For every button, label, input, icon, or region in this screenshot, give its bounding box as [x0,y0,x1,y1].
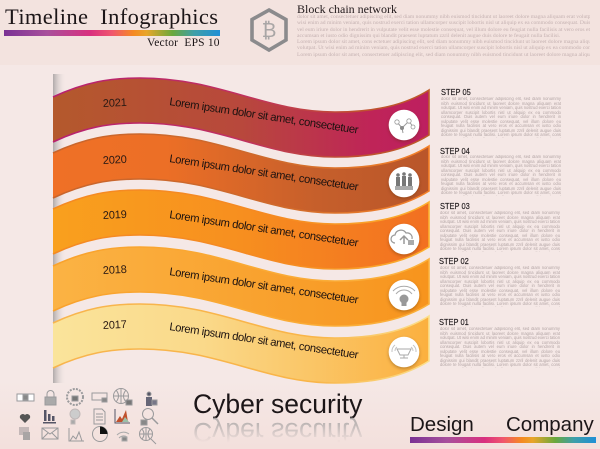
icon: search bulb [70,409,80,424]
icon: globe lock [114,388,132,405]
step 04 label: STEP 04 [440,146,470,156]
subtitle: Vector EPS 10 [147,37,220,49]
block chain body text: vel eum iriure dolor in hendrerit in vulputate velit esse molestie consequat, vel illum dolore eu feugiat nulla facilisis at vero eros et [297,27,590,33]
icon grid [16,388,158,444]
ribbon 2018 [53,247,429,326]
icon: network nodes [389,110,419,140]
ribbon 2018: Lorem ipsum dolor sit amet, consectetuer [169,266,359,307]
ribbon 2019: 2019 [103,209,127,222]
icon: cloud lock [389,224,419,254]
ribbon 2017: 2017 [103,319,127,332]
icon: heart [20,414,30,423]
block chain heading: Block chain network [297,2,397,16]
icon: wifi shield [389,280,419,310]
ribbon 2019: Lorem ipsum dolor sit amet, consectetuer [169,209,359,250]
cyber security heading: Cyber security [193,389,362,419]
block chain body text [297,14,590,58]
ribbon 2021: 2021 [103,97,127,110]
step 05 label: STEP 05 [441,87,471,97]
icon: line chart [115,409,130,423]
icon: person lock [146,392,157,406]
brand: design: Design [410,413,474,436]
header band [0,0,600,65]
ribbon 2018: 2018 [103,264,127,277]
icon: router signal [389,337,419,367]
icon: monitor lock [92,393,107,402]
icon: pie chart [92,426,108,442]
icon: gear lock [67,389,83,405]
ribbon 2021: Lorem ipsum dolor sit amet, consectetuer [169,96,359,137]
icon: group of people [389,167,419,197]
icon: globe search [140,428,156,444]
left fold shadow [53,74,66,383]
icon: envelope [42,428,58,439]
step 01 label: STEP 01 [439,317,469,327]
icon: document [94,409,105,424]
icon: touch grid [19,427,30,440]
step 03 label: STEP 03 [440,201,470,211]
ribbon 2020: Lorem ipsum dolor sit amet, consectetuer [169,153,359,194]
icon: blockchain hexagon: ₿ [262,18,276,42]
icon: blockchain hexagon [250,8,288,52]
icon: area chart [69,428,84,441]
step 02 label: STEP 02 [439,256,469,266]
icon: lock screen [17,394,34,401]
rainbow footer bar [410,437,596,443]
icon: bar chart [43,410,56,424]
ribbon 2020: 2020 [103,154,127,167]
ribbon 2020 [53,134,429,213]
icon: padlock [45,390,56,405]
ribbon 2019 [53,190,429,269]
block chain body text: accumsan et iusto odio dignissim qui blandit praesent luptatum zzril delenit augue duis dolore te feugait nulla facilisi. [297,33,560,39]
icon: wifi lock [117,432,129,441]
ribbon 2017: Lorem ipsum dolor sit amet, consectetuer [169,321,359,362]
icon: search lock [141,408,158,425]
ribbon 2021 [53,78,429,157]
ribbon 2017 [53,304,429,383]
title: Timeline Infographics [5,4,218,29]
brand: company: Company [506,413,594,436]
rainbow title bar [4,30,220,36]
cyber security reflection: Cyber security [193,417,362,447]
